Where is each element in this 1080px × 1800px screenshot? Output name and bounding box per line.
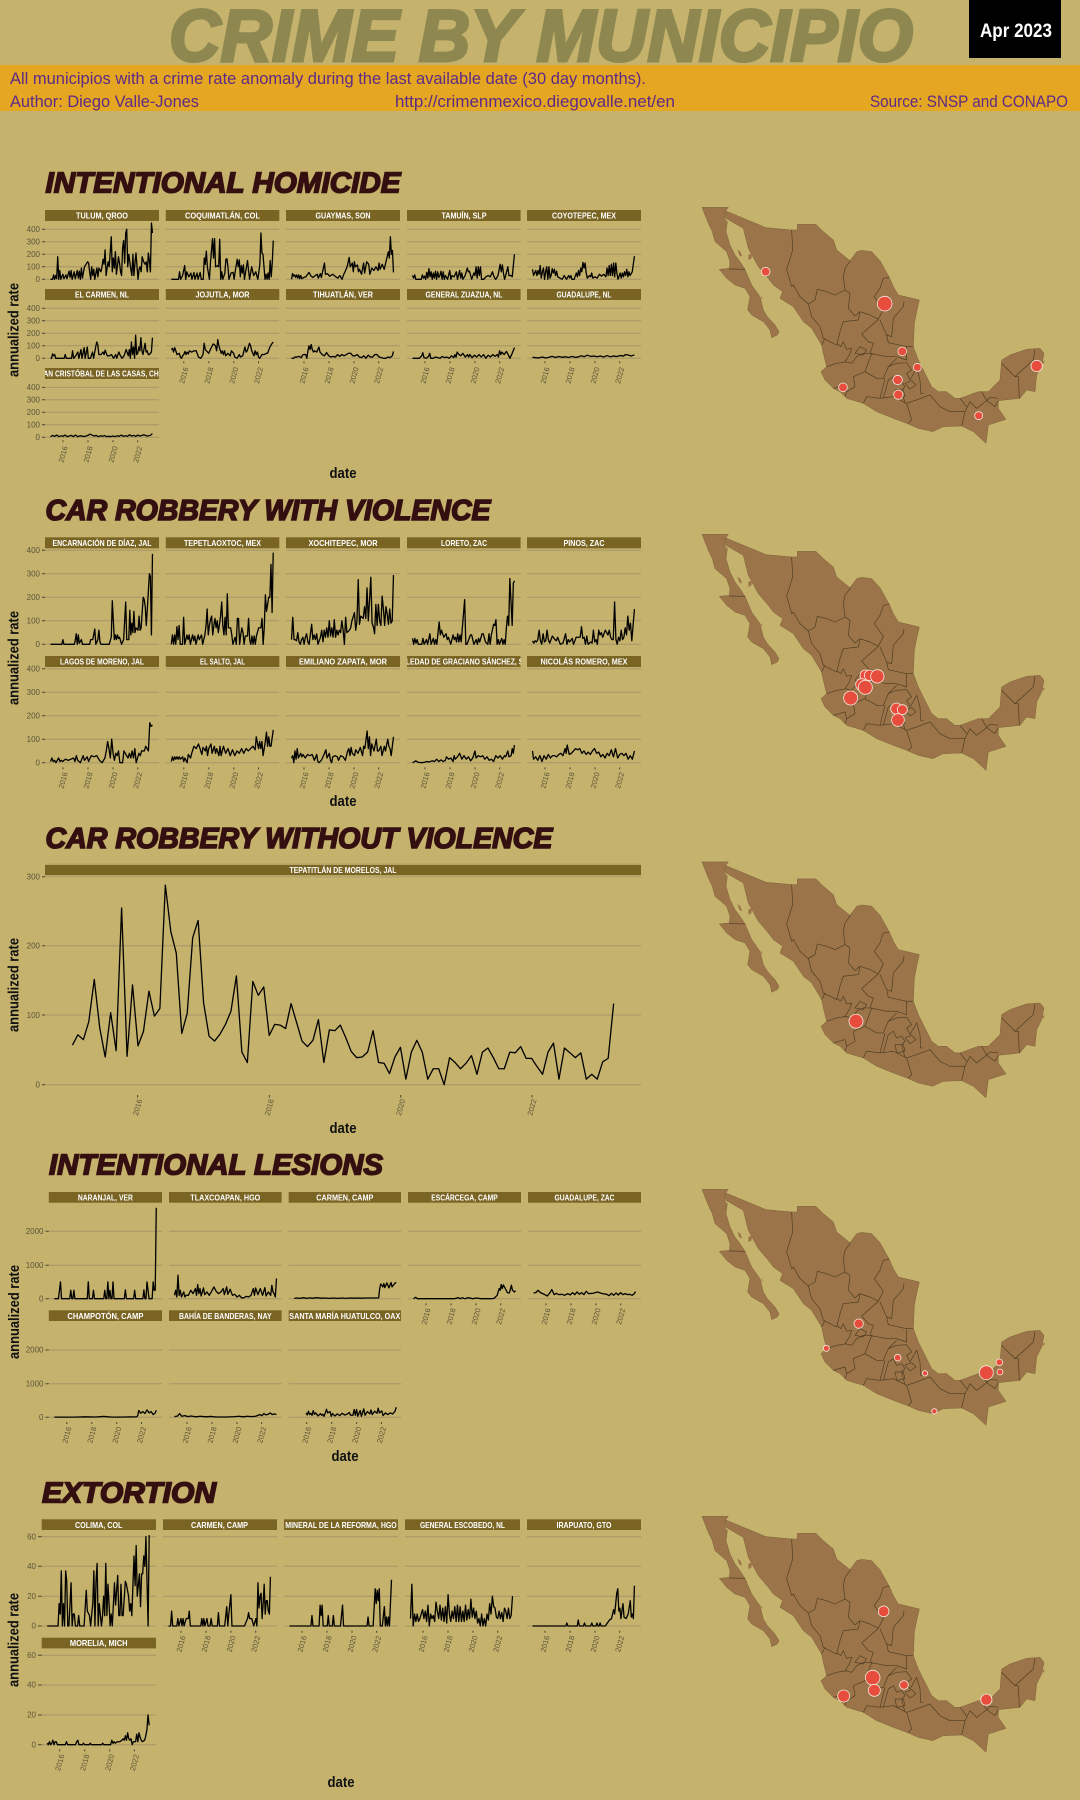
panel: General Zuazua: 2018 (444, 366, 457, 385)
chart: intentional lesions (6, 1192, 641, 1465)
panel: Coquimatlan (166, 210, 279, 279)
panel: Tepetlaoxtoc (166, 537, 279, 644)
panel: Guadalupe Zac: 2016 (540, 1307, 553, 1326)
panel: Bahia de Banderas (169, 1310, 282, 1444)
panel: Mineral de la Reforma (284, 1519, 398, 1653)
panel: Naranjal: 2000 (26, 1227, 44, 1236)
panel: Morelia: 2020 (103, 1753, 116, 1772)
panel: Champoton: CHAMPOTÓN, CAMP (67, 1310, 144, 1321)
panel: Tihuatlan: 2022 (372, 366, 385, 385)
panel: Santa Maria Huatulco: SANTA MARÍA HUATULCO, OAX (289, 1311, 401, 1321)
panel: Escarcega: 2018 (445, 1307, 458, 1326)
panel: Encarnacion de Diaz: 200 (27, 593, 41, 602)
header band (0, 65, 1080, 111)
panel: El Carmen: 300 (27, 316, 41, 326)
panel: Soledad de Graciano Sanchez: 2020 (469, 771, 482, 790)
panel: Tulum: TULUM, QROO (76, 210, 128, 220)
panel: Jojutla: 2016 (177, 366, 190, 385)
panel: Soledad de Graciano Sanchez: 2018 (444, 771, 457, 790)
panel: Emiliano Zapata: 2022 (372, 771, 385, 790)
panel: Soledad de Graciano Sanchez: SOLEDAD DE GRACIANO SÁNCHEZ, SLP (396, 656, 532, 666)
panel: Santa Maria Huatulco: 2018 (325, 1426, 338, 1444)
panel: Soledad de Graciano Sanchez: 2016 (419, 771, 432, 790)
panel: San Cristobal: SAN CRISTÓBAL DE LAS CASAS, CHIS (39, 368, 165, 378)
panel: Morelia (27, 1638, 156, 1772)
x axis labels (131, 1098, 538, 1117)
panel: Carmen: CARMEN, CAMP (191, 1520, 248, 1530)
panel: Colima: 40 (27, 1562, 37, 1571)
heading: intentional homicide: INTENTIONAL HOMICIDE (46, 168, 402, 200)
line: Tepatitlan de Morelos (72, 885, 614, 1085)
panel: General Zuazua: GENERAL ZUAZUA, NL (426, 290, 502, 300)
panel: General Escobedo: 2020 (467, 1635, 480, 1653)
panel: Mineral de la Reforma: 2016 (296, 1635, 309, 1653)
panel: Encarnacion de Diaz: 100 (27, 616, 41, 626)
panel: Lagos de Moreno: 300 (27, 688, 41, 697)
panel: Tepetlaoxtoc: TEPETLAOXTOC, MEX (184, 538, 261, 548)
panel: Tulum: 100 (27, 262, 41, 272)
panel: Encarnacion de Diaz: 400 (27, 546, 41, 555)
panel: Champoton: 2020 (110, 1426, 123, 1444)
panel: Lagos de Moreno: 200 (27, 711, 41, 720)
panel: Guadalupe Zac (528, 1192, 641, 1326)
panel: Carmen: CARMEN, CAMP (316, 1192, 374, 1202)
chart: extortion (6, 1519, 641, 1791)
panel: San Cristobal: 300 (27, 396, 41, 404)
panel: Bahia de Banderas: 2016 (181, 1426, 194, 1444)
panel: Tihuatlan (286, 289, 400, 385)
panel: General Escobedo: 2016 (417, 1635, 430, 1653)
panel: Encarnacion de Diaz (27, 537, 159, 649)
x axis title: date (330, 793, 356, 810)
panel: San Cristobal: 0 (36, 433, 41, 442)
panel: Naranjal (26, 1192, 162, 1303)
panel: Loreto: LORETO, ZAC (441, 538, 487, 548)
panel: Morelia: 2018 (78, 1753, 91, 1772)
panel: Morelia: 2016 (53, 1753, 66, 1772)
y axis title: annualized rate (6, 938, 22, 1032)
panel: El Carmen: 100 (27, 342, 41, 350)
panel: Irapuato (527, 1519, 641, 1653)
panel: Carmen: 2016 (175, 1635, 188, 1653)
panel: General Escobedo (405, 1519, 520, 1653)
panel: Guadalupe NL (527, 289, 641, 385)
map: extortion (702, 1516, 1045, 1752)
panel: Carmen (289, 1192, 401, 1299)
panel: Emiliano Zapata (286, 656, 400, 790)
panel: Lagos de Moreno: LAGOS DE MORENO, JAL (60, 656, 144, 666)
panel: El Carmen (27, 289, 159, 363)
panel: Santa Maria Huatulco: 2020 (350, 1426, 363, 1444)
panel: Champoton (26, 1310, 162, 1444)
panel: Bahia de Banderas: 2020 (231, 1426, 244, 1444)
panel: Morelia: 0 (32, 1740, 37, 1749)
panel: Irapuato: 2020 (589, 1635, 602, 1653)
panel: Tlaxcoapan: TLAXCOAPAN, HGO (190, 1192, 261, 1202)
x axis labels: 2020 (394, 1098, 407, 1117)
y axis title: annualized rate (6, 1593, 22, 1687)
panel: Irapuato: 2016 (539, 1635, 552, 1653)
panel: General Zuazua (407, 289, 521, 385)
panel: Naranjal: 0 (39, 1294, 44, 1303)
panel: General Zuazua: 2022 (493, 366, 506, 385)
panel: Tulum: 300 (27, 238, 41, 246)
panel: Carmen: 2020 (225, 1635, 238, 1653)
panel: Lagos de Moreno: 2020 (107, 771, 120, 790)
panel: Carmen: 2018 (200, 1635, 213, 1653)
panel: Tamuin (407, 210, 521, 279)
y axis labels: 200 (27, 942, 41, 950)
panel: Nicolas Romero: 2022 (613, 771, 626, 790)
map: car robbery without violence (702, 862, 1045, 1098)
panel: Xochitepec (286, 537, 400, 644)
panel: Soledad de Graciano Sanchez (407, 656, 521, 789)
y axis title: annualized rate (6, 283, 22, 377)
heading: intentional lesions: INTENTIONAL LESIONS (49, 1150, 384, 1182)
panel: Mineral de la Reforma: 2020 (346, 1635, 359, 1653)
panel: Naranjal: NARANJAL, VER (78, 1192, 133, 1202)
panel: Morelia: MORELIA, MICH (70, 1638, 128, 1648)
panel: Lagos de Moreno: 2018 (82, 771, 95, 790)
panel: Tihuatlan: 2020 (348, 366, 361, 385)
heading: car robbery without violence: CAR ROBBERY WITHOUT VIOLENCE (46, 823, 554, 855)
panel: Escarcega: 2020 (470, 1307, 483, 1326)
panel: Carmen (163, 1519, 277, 1653)
panel: El Salto: 2016 (177, 771, 190, 790)
panel: Lagos de Moreno: 2022 (131, 771, 144, 790)
map: car robbery with violence (702, 534, 1045, 770)
y axis labels: 300 (27, 872, 41, 882)
panel: Emiliano Zapata: EMILIANO ZAPATA, MOR (299, 656, 387, 666)
y axis labels (27, 872, 41, 1090)
panel: San Cristobal: 2016 (57, 445, 70, 464)
panel: Irapuato: IRAPUATO, GTO (556, 1520, 612, 1530)
panel: Encarnacion de Diaz: 0 (36, 640, 41, 649)
panel: Guadalupe NL: GUADALUPE, NL (556, 290, 612, 300)
panel: Pinos (527, 537, 641, 644)
panel: Tulum: 0 (36, 275, 41, 284)
panel: San Cristobal: 200 (27, 408, 41, 417)
y axis labels: 0 (36, 1080, 41, 1090)
panel: Guaymas (286, 210, 400, 279)
panel: El Carmen: EL CARMEN, NL (75, 290, 129, 300)
panel: Tlaxcoapan (169, 1192, 282, 1299)
panel: Morelia: 20 (27, 1711, 37, 1720)
chart: intentional homicide (6, 210, 641, 482)
chart: car robbery without violence (6, 864, 641, 1137)
panel: El Salto: 2018 (202, 771, 215, 790)
panel: Tulum: 200 (27, 250, 41, 259)
subtitle: All municipios with a crime rate anomaly during the last available date (30 day months). (10, 69, 646, 88)
panel: Irapuato: 2018 (564, 1635, 577, 1653)
panel: Guadalupe NL: 2018 (564, 366, 577, 385)
panel: Guaymas: GUAYMAS, SON (316, 210, 370, 220)
x axis labels: 2018 (263, 1098, 276, 1117)
panel: Tulum: 400 (27, 225, 41, 234)
panel: Tihuatlan: 2018 (323, 366, 336, 385)
x axis title: date (328, 1774, 354, 1791)
date badge: Apr 2023 (980, 21, 1052, 42)
panel: Champoton: 2000 (26, 1346, 44, 1355)
panel: Escarcega: ESCÁRCEGA, CAMP (431, 1192, 498, 1202)
panel: Champoton: 1000 (26, 1379, 44, 1388)
author: Author: Diego Valle-Jones (10, 92, 199, 111)
panel: Colima: 20 (27, 1592, 37, 1601)
panel: Guadalupe NL: 2016 (539, 366, 552, 385)
panel: Encarnacion de Diaz: 300 (27, 570, 41, 578)
panel: El Salto: 2020 (227, 771, 240, 790)
panel: Colima: COLIMA, COL (75, 1520, 122, 1530)
panel: El Carmen: 400 (27, 304, 41, 313)
panel: Emiliano Zapata: 2016 (298, 771, 311, 790)
map: intentional lesions (702, 1189, 1045, 1425)
panel: Champoton: 0 (39, 1413, 44, 1422)
panel: Coyotepec (527, 210, 641, 279)
panel: Emiliano Zapata: 2020 (348, 771, 361, 790)
date badge (969, 0, 1061, 58)
panel: Tamuin: TAMUÍN, SLP (442, 210, 487, 220)
panel: El Salto (166, 656, 279, 790)
panel: Colima: 0 (32, 1622, 37, 1631)
panel: Jojutla: 2020 (227, 366, 240, 385)
panel: Escarcega: 2022 (494, 1307, 507, 1326)
panel: Carmen: 2022 (249, 1635, 262, 1653)
panel: Guadalupe Zac: 2018 (565, 1307, 578, 1326)
panel: Guadalupe Zac: 2022 (614, 1307, 627, 1326)
panel: Loreto (407, 537, 521, 644)
x axis title: date (332, 1448, 358, 1465)
panel: Escarcega: 2016 (420, 1307, 433, 1326)
strip: Tepatitlan de Morelos: TEPATITLÁN DE MORELOS, JAL (290, 865, 396, 875)
panel: Champoton: 2016 (60, 1426, 73, 1444)
panel: Guadalupe Zac: 2020 (590, 1307, 603, 1326)
panel: Champoton: 2018 (85, 1426, 98, 1444)
panel: Lagos de Moreno: 100 (27, 735, 41, 744)
panel: Morelia: 2022 (128, 1753, 141, 1772)
panel: Irapuato: 2022 (613, 1635, 626, 1653)
panel: Encarnacion de Diaz: ENCARNACIÓN DE DÍAZ, JAL (52, 537, 152, 548)
panel: Tulum (27, 210, 159, 284)
panel: Lagos de Moreno (27, 656, 159, 790)
panel: General Zuazua: 2020 (469, 366, 482, 385)
panel: General Zuazua: 2016 (419, 366, 432, 385)
y axis title: annualized rate (6, 1265, 23, 1359)
panel: Mineral de la Reforma: MINERAL DE LA REFORMA, HGO (285, 1520, 397, 1530)
panel: El Carmen: 0 (36, 354, 41, 363)
panel: Santa Maria Huatulco (289, 1310, 401, 1444)
panel: Naranjal: 1000 (26, 1261, 44, 1270)
panel: Coquimatlan: COQUIMATLÁN, COL (185, 210, 260, 220)
panel: Santa Maria Huatulco: 2016 (300, 1426, 313, 1444)
heading: car robbery with violence: CAR ROBBERY WITH VIOLENCE (46, 495, 492, 527)
panel: Champoton: 2022 (135, 1426, 148, 1444)
x axis labels: 2022 (525, 1098, 538, 1117)
panel: Colima (27, 1519, 156, 1631)
panel: Lagos de Moreno: 400 (27, 664, 41, 673)
heading: extortion: EXTORTION (42, 1478, 217, 1510)
panel: San Cristobal: 2020 (107, 445, 120, 464)
panel: Tihuatlan: 2016 (298, 366, 311, 385)
panel: San Cristobal: 100 (27, 420, 41, 430)
panel: El Carmen: 200 (27, 329, 41, 338)
panel: General Escobedo: GENERAL ESCOBEDO, NL (420, 1520, 505, 1530)
panel: Emiliano Zapata: 2018 (323, 771, 336, 790)
panel: Escarcega (408, 1192, 521, 1326)
panel: San Cristobal: 2018 (82, 445, 95, 464)
panel: Nicolas Romero: 2020 (589, 771, 602, 790)
panel: Lagos de Moreno: 2016 (57, 771, 70, 790)
panel: Mineral de la Reforma: 2018 (321, 1635, 334, 1653)
url: http://crimenmexico.diegovalle.net/en (395, 92, 675, 111)
panel: Nicolas Romero: 2016 (539, 771, 552, 790)
panel: Bahia de Banderas: 2018 (206, 1426, 219, 1444)
panel: Guadalupe Zac: GUADALUPE, ZAC (554, 1192, 614, 1202)
panel: Xochitepec: XOCHITEPEC, MOR (308, 538, 378, 548)
panel: Jojutla: 2018 (202, 366, 215, 385)
panel: Jojutla: JOJUTLA, MOR (196, 290, 250, 300)
panel: Nicolas Romero: NICOLÁS ROMERO, MEX (540, 656, 628, 666)
panel: Bahia de Banderas: BAHÍA DE BANDERAS, NAY (179, 1311, 272, 1321)
panel: General Escobedo: 2022 (491, 1635, 504, 1653)
panel: San Cristobal (27, 368, 165, 464)
panel: Jojutla (166, 289, 279, 385)
x axis title: date (330, 1120, 356, 1137)
panel: Tihuatlan: TIHUATLÁN, VER (313, 290, 373, 300)
panel: Bahia de Banderas: 2022 (255, 1426, 268, 1444)
panel: Mineral de la Reforma: 2022 (370, 1635, 383, 1653)
y axis title: annualized rate (6, 611, 22, 705)
panel: General Escobedo: 2018 (442, 1635, 455, 1653)
panel: El Salto: 2022 (252, 771, 265, 790)
panel: Pinos: PINOS, ZAC (564, 538, 604, 548)
panel: Coyotepec: COYOTEPEC, MEX (552, 210, 616, 220)
panel: Nicolas Romero: 2018 (564, 771, 577, 790)
panel: San Cristobal: 2022 (131, 445, 144, 464)
map: intentional homicide (702, 207, 1045, 443)
panel: Santa Maria Huatulco: 2022 (375, 1426, 388, 1444)
panel: Colima: 60 (27, 1532, 37, 1541)
strip: Tepatitlan de Morelos (45, 864, 641, 878)
panel: El Salto: EL SALTO, JAL (200, 656, 245, 666)
x axis labels: 2016 (131, 1098, 144, 1117)
panel: Lagos de Moreno: 0 (36, 758, 41, 767)
panel: Morelia: 60 (27, 1651, 37, 1660)
chart: car robbery with violence (6, 537, 641, 810)
panel: Guadalupe NL: 2022 (613, 366, 626, 385)
x axis title: date (330, 465, 356, 482)
panel: Soledad de Graciano Sanchez: 2022 (493, 771, 506, 790)
panel: Jojutla: 2022 (252, 366, 265, 385)
y axis labels: 100 (27, 1011, 41, 1020)
panel: Morelia: 40 (27, 1681, 37, 1690)
panel: Guadalupe NL: 2020 (589, 366, 602, 385)
panel: Nicolas Romero (527, 656, 641, 790)
panel: San Cristobal: 400 (27, 383, 41, 392)
